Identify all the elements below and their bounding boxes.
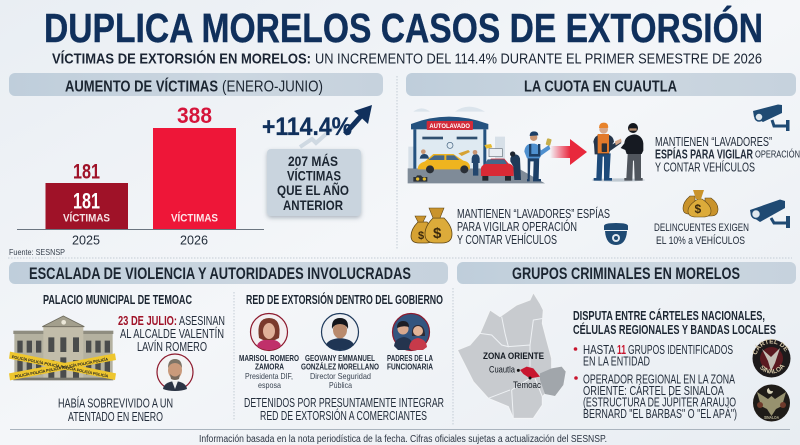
source: Fuente: SESNSP: [9, 248, 65, 257]
callout: 207 más víctimas: [267, 149, 361, 216]
bullet: grupos identificados: GRUPOS IDENTIFICADOS: [628, 343, 733, 357]
bar 2025: 2025: [72, 232, 100, 248]
person: Marisol Romero: esposa: [258, 380, 281, 390]
heading: aumento de víctimas: [9, 73, 383, 96]
arrow: red: [550, 139, 587, 165]
text: lavadores espías: Y CONTAR VEHÍCULOS: [655, 160, 755, 174]
person: Marisol Romero: [239, 314, 299, 390]
panel: aumento de víctimas: [9, 73, 383, 257]
text: lavadores espías (segundo): MANTIENEN “LAVADORES” ESPÍAS: [457, 206, 610, 221]
text: detenidos: RED DE EXTORSIÓN A COMERCIANTES: [260, 408, 427, 423]
icon: money bags small: $: [694, 202, 702, 216]
text: asesinato del alcalde: LAVÍN ROMERO: [137, 339, 207, 354]
bullet: operador regional: BERNARD "EL BARBAS" O "EL APÁ"): [583, 406, 737, 421]
person: Geovany Emmanuel: [301, 314, 379, 390]
portrait: alcalde: [157, 354, 193, 391]
panel: grupos criminales: [457, 262, 796, 422]
logo: grupo Sinaloa: [753, 384, 790, 422]
illustration: autolavado: [408, 107, 552, 183]
text: asesinato del alcalde: [118, 314, 225, 354]
heading: la cuota en Cuautla: LA CUOTA EN CUAUTLA: [524, 78, 677, 96]
person: padres de la funcionaria: [387, 314, 433, 372]
logo: grupo Sinaloa: SINALOA: [764, 415, 780, 420]
bullet: operador regional: OPERADOR REGIONAL EN LA ZONA: [583, 372, 735, 386]
text: lavadores espías: [655, 135, 800, 174]
person: Geovany Emmanuel: GEOVANY EMMANUEL: [305, 353, 375, 363]
icon: money bags: $: [433, 225, 442, 242]
bullet: operador regional: (ESTRUCTURA DE JÚPITER ARAUJO: [583, 394, 736, 410]
text: atentado en enero: ATENTADO EN ENERO: [68, 410, 163, 424]
person: Marisol Romero: ZAMORA: [255, 362, 284, 372]
map: Morelos: Temoac: [513, 380, 541, 390]
text: atentado en enero: [58, 396, 173, 424]
subtitle: VÍCTIMAS DE EXTORSIÓN EN MORELOS:: [52, 50, 311, 68]
text: lavadores espías (segundo): [457, 206, 610, 247]
text: delincuentes exigen: DELINCUENTES EXIGEN: [654, 222, 749, 234]
text: asesinato del alcalde: 23 DE JULIO:: [118, 314, 177, 328]
person: Geovany Emmanuel: Director Seguridad: [310, 371, 371, 381]
icon: dome camera: [604, 223, 628, 245]
icon: money bags: [411, 208, 452, 243]
footer note: Información basada en la nota periodística de la fecha. Cifras oficiales sujetas a actualización del SESNSP.: [199, 434, 607, 445]
person: Marisol Romero: MARISOL ROMERO: [239, 353, 299, 363]
person: padres de la funcionaria: PADRES DE LA: [387, 353, 433, 363]
heading: aumento de víctimas: AUMENTO DE VÍCTIMAS: [65, 76, 218, 96]
arrow: growth: [300, 105, 372, 147]
bar 2025: VÍCTIMAS: [63, 212, 110, 224]
bullet: grupos identificados: EN LA ENTIDAD: [583, 354, 650, 368]
callout: 207 más víctimas: 207 MÁS: [288, 153, 338, 169]
subtitle: [52, 50, 762, 68]
bar 2026: 388: [177, 103, 212, 128]
bar 2025: [46, 160, 128, 248]
bar 2025: 181: [73, 160, 100, 184]
map: Morelos: ZONA ORIENTE: [483, 351, 544, 362]
heading: la cuota en Cuautla: [406, 73, 796, 96]
text: asesinato del alcalde: ASESINAN: [179, 314, 225, 328]
panel: escalada de violencia: [9, 262, 448, 424]
callout: 207 más víctimas: VÍCTIMAS: [287, 168, 341, 184]
text: disputa entre cárteles: [573, 308, 776, 337]
text: asesinato del alcalde: AL ALCALDE VALENTÍN: [120, 326, 224, 341]
person: padres de la funcionaria: FUNCIONARIA: [387, 362, 433, 372]
bar 2026: VÍCTIMAS: [171, 212, 218, 224]
police tape: POLICÍA POLICÍA POLICÍA POLICÍA POLICÍA POLICÍA: [11, 354, 109, 379]
bar chart: [17, 103, 264, 248]
icon: security camera 2: [750, 200, 790, 228]
text: delincuentes exigen: [654, 222, 749, 247]
icon: security camera: [753, 104, 790, 131]
bullet: grupos identificados: [574, 343, 733, 368]
heading: red de extorsión: RED DE EXTORSIÓN DENTRO DEL GOBIERNO: [246, 292, 443, 307]
text: lavadores espías (segundo): PARA VIGILAR OPERACIÓN: [457, 219, 577, 234]
bar 2026: 2026: [180, 232, 208, 248]
person: Marisol Romero: Presidenta DIF,: [245, 371, 293, 381]
text: atentado en enero: HABÍA SOBREVIVIDO A UN: [58, 396, 173, 410]
bullet: operador regional: ORIENTE: CÁRTEL DE SINALOA: [583, 383, 724, 398]
growth percentage: +114.4%: [262, 113, 352, 141]
person: Geovany Emmanuel: GONZÁLEZ MORELLANO: [301, 362, 379, 372]
map: Morelos: [457, 293, 566, 418]
bar 2026: [153, 103, 236, 248]
callout: 207 más víctimas: ANTERIOR: [283, 197, 343, 213]
police tape: POLICÍA POLICÍA POLICÍA POLICÍA POLICÍA POLICÍA: [14, 356, 109, 379]
text: lavadores espías (segundo): Y CONTAR VEHÍCULOS: [457, 232, 557, 247]
heading: aumento de víctimas: (ENERO-JUNIO): [222, 78, 323, 96]
illustration: autolavado: AUTOLAVADO: [429, 123, 470, 130]
icon: money bags small: [683, 190, 718, 217]
figure: worker and extortionist: [592, 123, 645, 182]
map: Morelos: Cuautla: [489, 364, 515, 374]
logo: Cártel de Sinaloa: CÁRTEL DE: [752, 339, 789, 354]
illustration: palacio municipal: [9, 316, 116, 380]
bar 2025: 181: [73, 188, 100, 214]
heading: palacio municipal: PALACIO MUNICIPAL DE TEMOAC: [43, 293, 192, 307]
logo: Cártel de Sinaloa: [752, 339, 790, 378]
person: Geovany Emmanuel: Pública: [329, 380, 352, 390]
text: delincuentes exigen: EL 10% a VEHÍCULOS: [656, 234, 745, 247]
logo: Cártel de Sinaloa: SINALOA: [760, 364, 785, 374]
text: lavadores espías: ESPÍAS PARA VIGILAR: [655, 146, 753, 162]
text: detenidos: [244, 396, 444, 423]
bullet: grupos identificados: 11: [617, 343, 626, 357]
heading: escalada de violencia: ESCALADA DE VIOLENCIA Y AUTORIDADES INVOLUCRADAS: [29, 264, 411, 283]
callout: 207 más víctimas: QUE EL AÑO: [277, 181, 349, 198]
icon: money bags: $: [418, 230, 424, 242]
figure: worker with money: [524, 131, 552, 181]
text: detenidos: DETENIDOS POR PRESUNTAMENTE INTEGRAR: [244, 396, 444, 410]
bullet: grupos identificados: HASTA: [583, 343, 616, 357]
bullet: operador regional: [574, 372, 737, 421]
panel: la cuota en Cuautla: [406, 73, 800, 247]
